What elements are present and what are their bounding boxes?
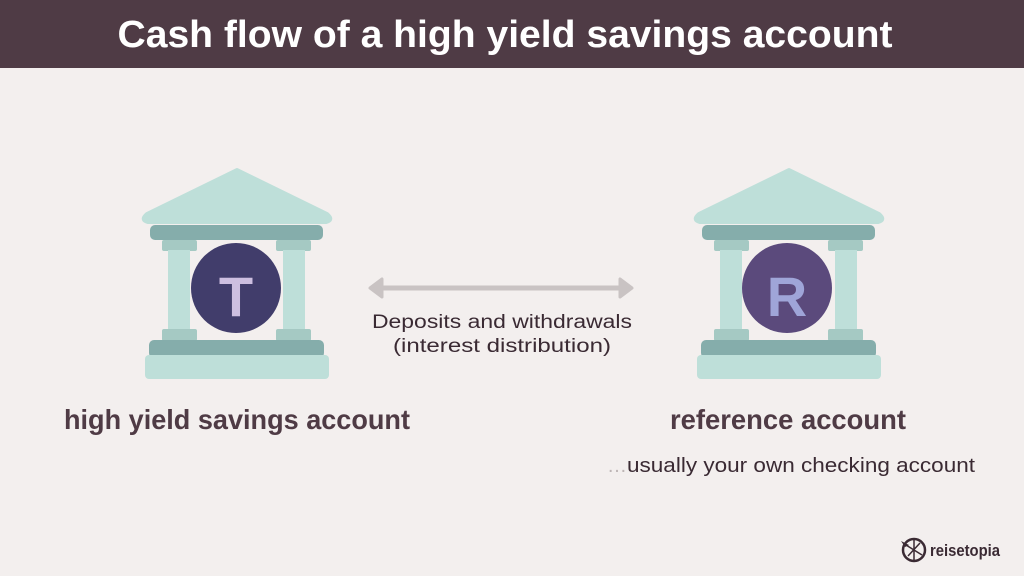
arrow label: Deposits and withdrawals (372, 312, 632, 333)
title bar: Cash flow of a high yield savings account (118, 14, 893, 56)
logo: reisetopia: reisetopia (930, 541, 1000, 560)
label: high yield savings account: high yield savings account (64, 404, 410, 435)
logo: reisetopia (901, 539, 1000, 561)
subtext: checking account: usually your own checking account (627, 455, 975, 477)
arrow label: (interest distribution) (393, 336, 611, 357)
label: reference account: reference account (670, 404, 906, 435)
icon: bank T (144, 170, 330, 379)
icon: bank R: R (767, 265, 807, 328)
arrow: double-headed (370, 279, 632, 297)
arrow label (372, 312, 632, 357)
subtext: checking account: … (607, 455, 627, 477)
icon: bank T: T (219, 265, 253, 328)
icon: bank R (696, 170, 882, 379)
title bar (0, 0, 1024, 68)
